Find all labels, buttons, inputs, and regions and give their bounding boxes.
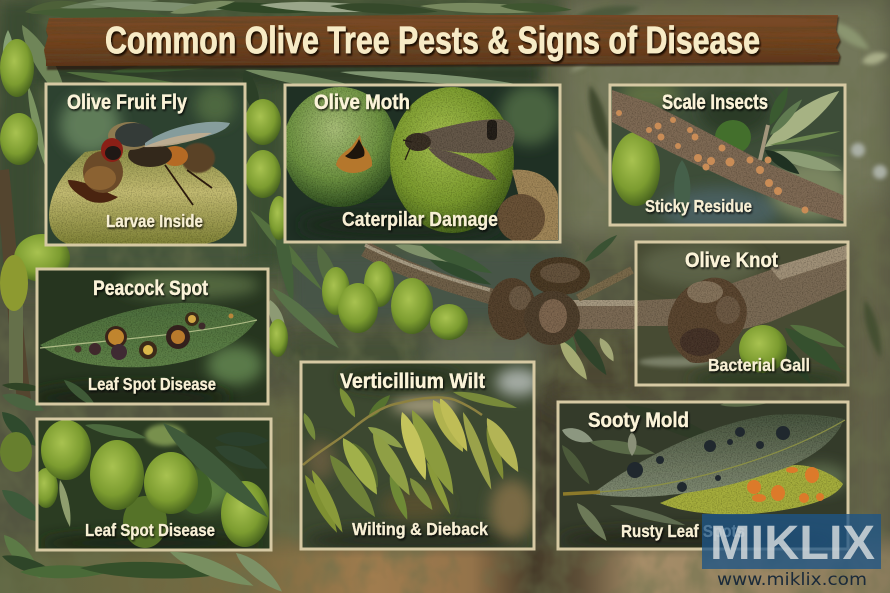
leaf over olives xyxy=(164,424,268,517)
caption: Caterpilar Damage xyxy=(342,209,498,231)
leaves xyxy=(785,324,846,384)
panel: Olive Fruit Fly xyxy=(46,84,245,245)
heading: Olive Moth xyxy=(314,91,410,114)
heading: Verticillium Wilt xyxy=(340,370,485,393)
olives behind panels on the left and middle xyxy=(0,39,289,472)
panel: Leaf Spot Disease olives xyxy=(34,415,275,553)
icon: dried olives xyxy=(497,170,558,242)
panel: Olive Knot xyxy=(630,242,850,390)
caption: Leaf Spot Disease xyxy=(85,520,215,540)
icon: moth xyxy=(403,119,515,180)
watermark: Miklix logo xyxy=(702,514,881,590)
watermark: Miklix logo: MIKLIX xyxy=(710,517,875,570)
icon: olive xyxy=(739,325,787,373)
icon: wilting sprig xyxy=(300,386,526,535)
watermark: Miklix logo: www.miklix.com xyxy=(717,570,867,590)
icon: olives xyxy=(34,420,269,548)
icon: sooty leaf xyxy=(563,414,845,497)
caption: Bacterial Gall xyxy=(708,355,810,375)
panel: Scale Insects xyxy=(610,80,850,232)
heading: Olive Knot xyxy=(685,249,778,272)
caption: Rusty Leaf Spots xyxy=(621,521,745,541)
foliage: branches and leaves behind panels xyxy=(0,0,620,593)
heading: Peacock Spot xyxy=(93,277,208,300)
panel: Olive Moth xyxy=(283,85,560,242)
panel: Peacock Spot xyxy=(30,269,268,412)
panel: Verticillium Wilt xyxy=(300,362,540,554)
leaves xyxy=(562,404,766,541)
caption: Sticky Residue xyxy=(645,196,752,216)
icon: infested olive xyxy=(49,149,237,245)
heading: Scale Insects xyxy=(662,91,768,114)
icon: spotted leaf xyxy=(40,303,257,367)
heading: Sooty Mold xyxy=(588,409,689,432)
icon: healthy olive xyxy=(390,87,514,233)
icon: fruit fly xyxy=(83,122,230,205)
caption: Leaf Spot Disease xyxy=(88,374,216,394)
caption: Wilting & Dieback xyxy=(352,519,488,539)
icon: knotted branch xyxy=(630,244,850,363)
icon: damaged olive xyxy=(283,87,397,207)
caption: Larvae Inside xyxy=(106,211,203,231)
leaves xyxy=(56,420,271,528)
icon: rusty leaf xyxy=(660,465,843,515)
icon: scale-covered branch xyxy=(612,90,845,222)
panel: Sooty Mold xyxy=(558,396,848,552)
heading: Olive Fruit Fly xyxy=(67,91,187,114)
central branch with olive knots xyxy=(322,245,650,345)
title banner: wooden plank xyxy=(44,15,841,70)
leaves xyxy=(765,88,842,174)
